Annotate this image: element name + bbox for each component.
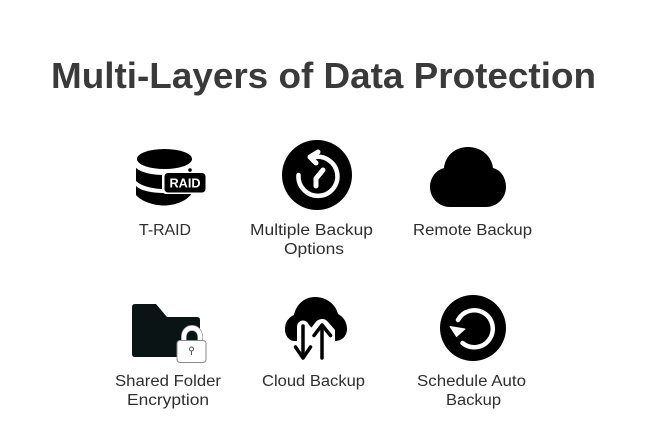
item: Cloud Backup	[262, 297, 365, 390]
icon: RAID disk stack: RAID	[170, 176, 200, 190]
icon: schedule refresh	[440, 295, 506, 361]
icon: cloud with up and down arrows	[285, 297, 347, 358]
label: Schedule Auto Backup: Schedule Auto	[417, 373, 526, 390]
label: Shared Folder Encryption	[115, 373, 221, 409]
label: T-RAID: T-RAID	[139, 222, 191, 239]
label: Remote Backup: Remote Backup	[413, 222, 532, 239]
label: Multiple Backup Options: Options	[284, 241, 344, 258]
item: Schedule Auto Backup	[417, 295, 526, 409]
label: Multiple Backup Options	[250, 222, 373, 258]
label: Shared Folder Encryption: Shared Folder	[115, 373, 221, 390]
icon: cloud	[430, 147, 506, 207]
item: Shared Folder Encryption	[115, 304, 221, 409]
item: Multiple Backup Options	[250, 140, 373, 258]
label: Cloud Backup: Cloud Backup	[262, 373, 365, 390]
icon: encrypted folder	[132, 304, 206, 362]
title: Multi-Layers of Data Protection	[51, 55, 596, 96]
label: Schedule Auto Backup: Backup	[446, 392, 501, 409]
label: Shared Folder Encryption: Encryption	[127, 392, 209, 409]
icon: backup clock	[282, 140, 352, 210]
item: T-RAID	[136, 149, 207, 239]
label: Schedule Auto Backup	[417, 373, 526, 409]
label: Multiple Backup Options: Multiple Backup	[250, 222, 373, 239]
item: Remote Backup	[413, 147, 532, 239]
